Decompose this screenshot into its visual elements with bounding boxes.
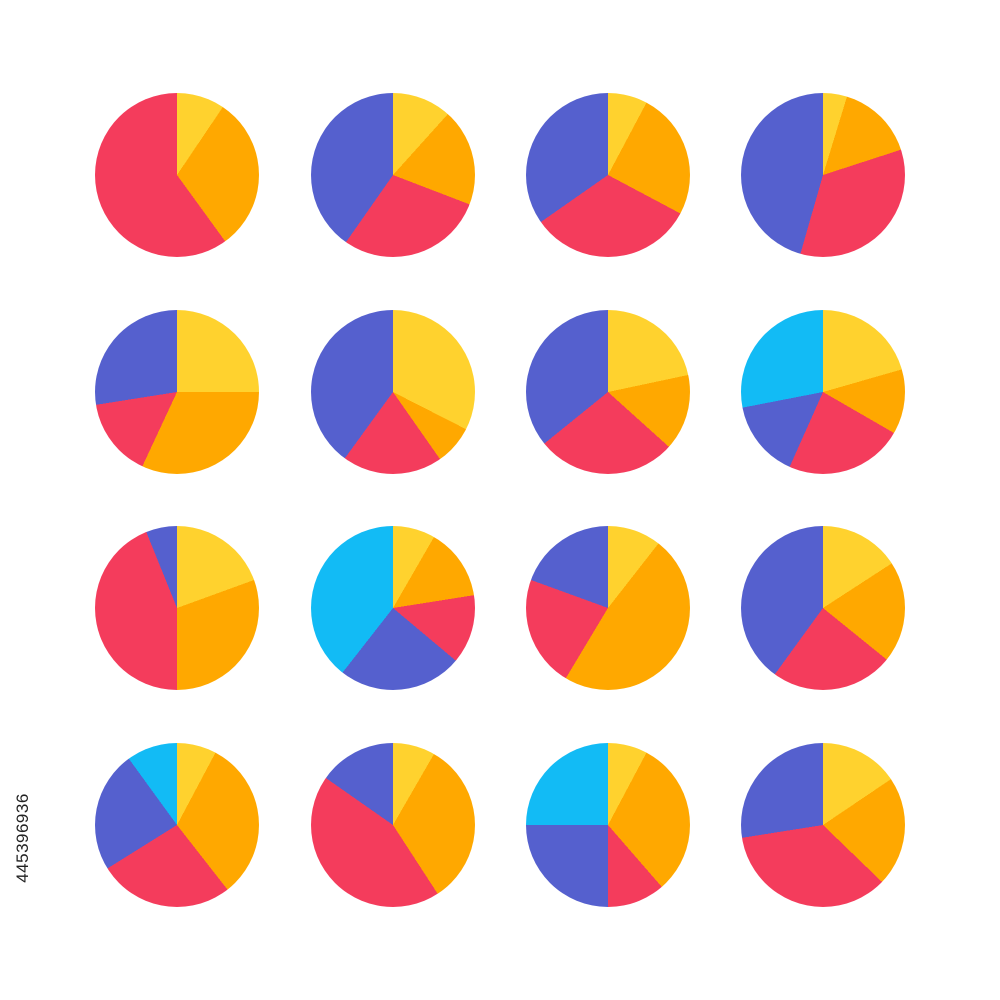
pie 10 <box>311 526 475 690</box>
pie 4 <box>741 93 905 257</box>
pie 6 <box>311 310 475 474</box>
stock id text: 445396936 <box>13 793 32 883</box>
pie 7 <box>526 310 690 474</box>
pie 9 <box>95 526 259 690</box>
pie 12 <box>741 526 905 690</box>
pie 3 <box>526 93 690 257</box>
pie 16 <box>741 743 905 907</box>
pie 11 <box>526 526 690 690</box>
pie 1 <box>95 93 259 257</box>
pie 13 <box>95 743 259 907</box>
pie 15 <box>526 743 690 907</box>
pie 8 <box>741 310 905 474</box>
pie 2 <box>311 93 475 257</box>
pie 14 <box>311 743 475 907</box>
pie 5 <box>95 310 259 474</box>
